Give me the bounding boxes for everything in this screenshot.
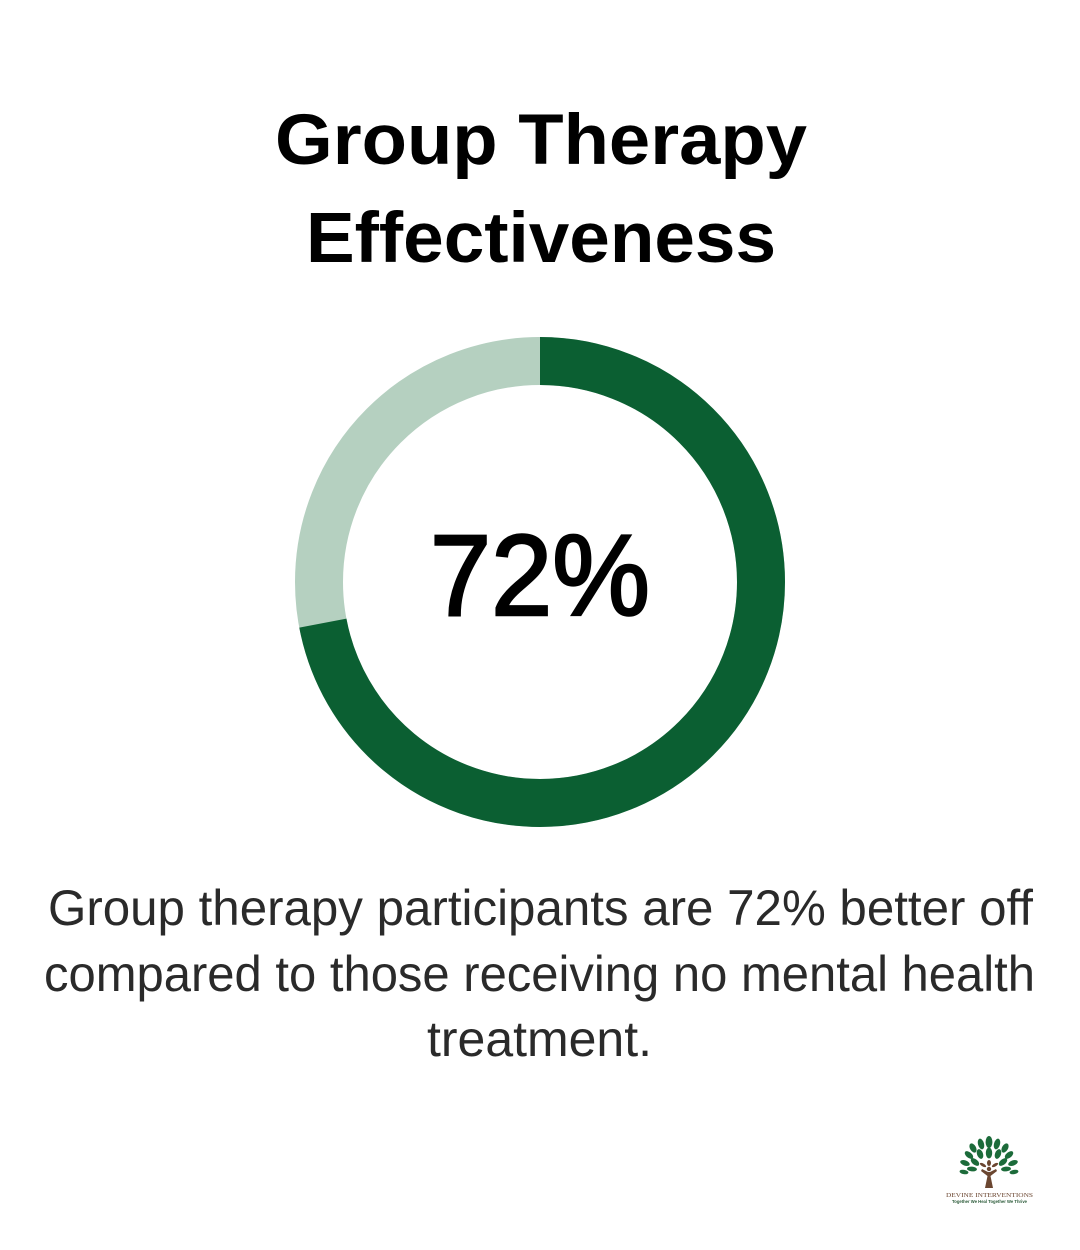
description text xyxy=(44,880,1035,1067)
description text: treatment. xyxy=(427,1011,652,1067)
logo: Devine Interventions xyxy=(946,1136,1033,1204)
title: Effectiveness xyxy=(306,199,776,278)
description text: compared to those receiving no mental health xyxy=(44,946,1035,1002)
description text: Group therapy participants are 72% better off xyxy=(48,880,1033,936)
donut value: 72% xyxy=(430,512,650,640)
title xyxy=(275,101,808,278)
title: Group Therapy xyxy=(275,101,808,180)
donut chart: 72% xyxy=(319,361,761,803)
icon: tree xyxy=(959,1136,1019,1188)
logo tagline: Together We Heal Together We Thrive xyxy=(952,1199,1027,1204)
logo name: DEVINE INTERVENTIONS xyxy=(946,1192,1033,1199)
